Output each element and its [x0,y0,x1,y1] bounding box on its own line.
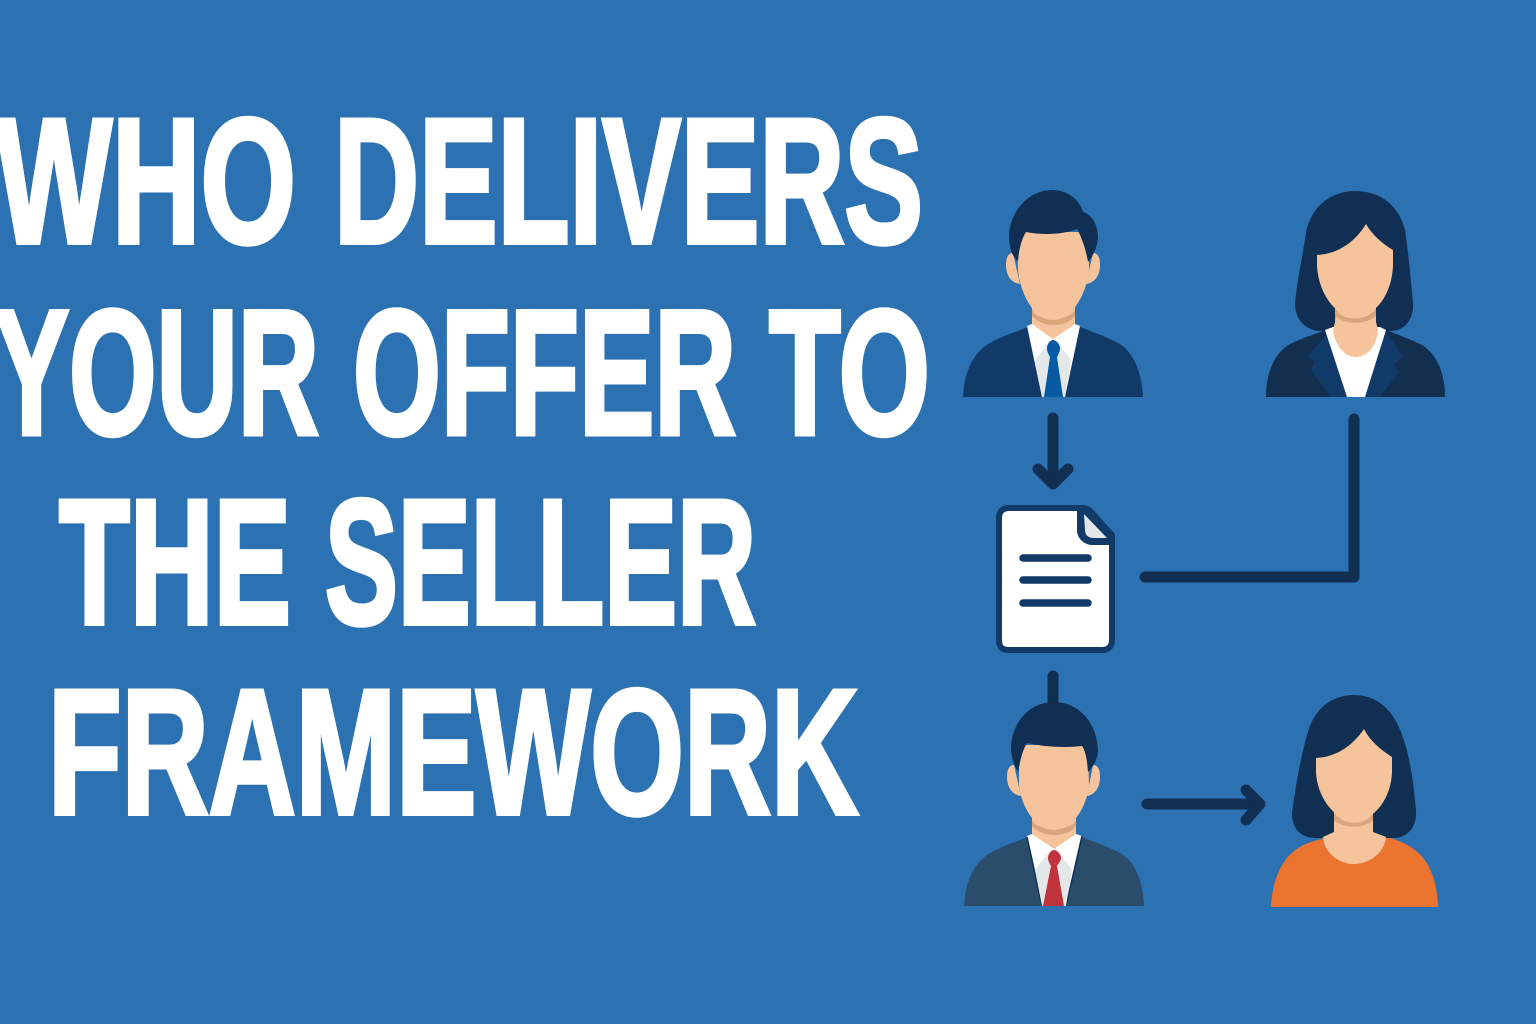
arrow: connector from document to woman [1145,419,1354,577]
icon: woman in orange top [1271,695,1438,907]
title: WHO [0,82,296,280]
icon: man in navy suit with blue tie [963,190,1143,397]
arrow: man to document [1038,418,1068,484]
arrow: connector from document to lower man [1048,676,1058,712]
title: SELLER [325,462,756,662]
title: TO [769,273,930,472]
arrow: lower man to customer [1147,790,1260,820]
title: YOUR [0,273,319,472]
title: OFFER [353,273,736,472]
icon: woman in dark blazer [1266,191,1445,397]
document text lines [1023,558,1088,603]
title: DELIVERS [334,82,923,280]
title: THE [59,462,291,662]
icon: document [999,508,1113,650]
title [0,82,930,852]
title: FRAMEWORK [48,652,858,852]
icon: man in grey suit with red tie [964,702,1144,906]
